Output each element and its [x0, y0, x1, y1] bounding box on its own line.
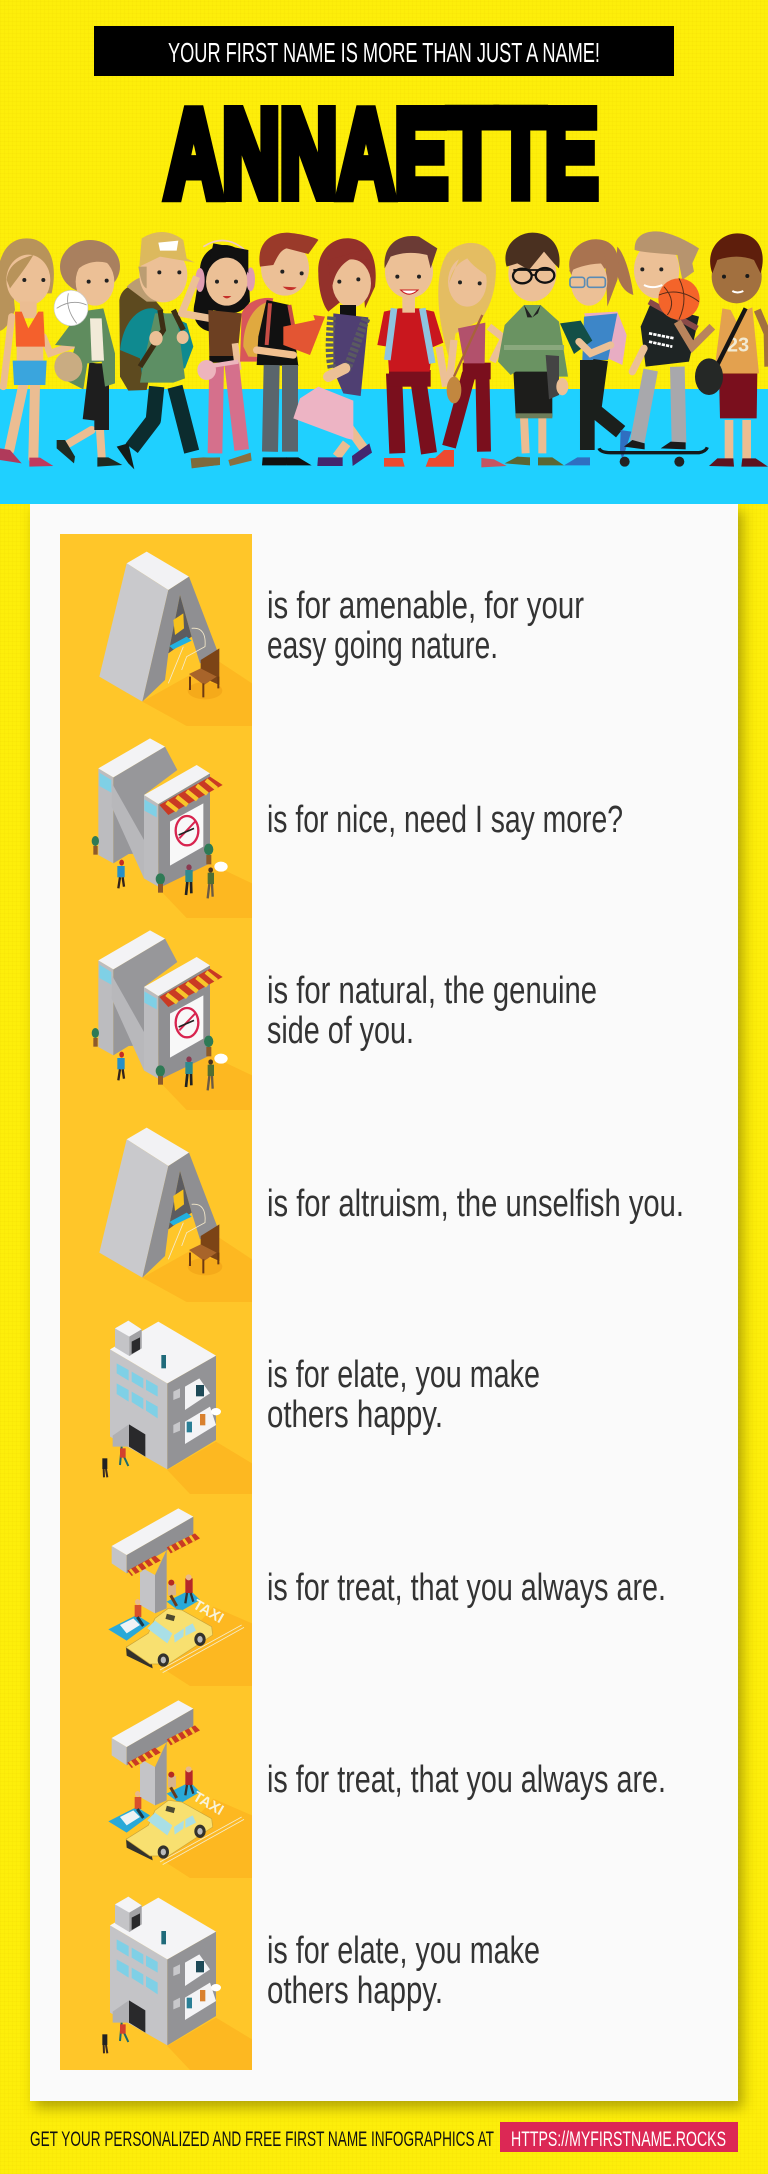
footer link badge [500, 2122, 738, 2152]
tile: letter T [60, 1494, 252, 1686]
row: T treat again [60, 1686, 666, 1878]
person 7 [377, 236, 453, 467]
tile: letter T: TAXI [190, 1597, 226, 1627]
row: A amenable [60, 534, 584, 726]
text: amenable: is for amenable, for your [267, 585, 584, 627]
text: elate again: is for elate, you make [267, 1930, 540, 1972]
text: elate [267, 1354, 540, 1436]
row: N natural [60, 918, 597, 1110]
text: natural [267, 970, 597, 1052]
text: natural: is for natural, the genuine [267, 970, 597, 1012]
person 4 [182, 241, 255, 467]
person 2 [54, 240, 122, 467]
person 1 [0, 238, 78, 467]
panel: white card [30, 504, 738, 2101]
person 12: 23 [727, 335, 749, 357]
person 8 [426, 243, 507, 467]
hero band: cyan floor [0, 389, 768, 504]
person 12 [695, 233, 768, 467]
tile: letter N again [60, 918, 252, 1110]
tile: letter E again [60, 1878, 252, 2070]
person 10 [560, 239, 633, 465]
row: T treat [60, 1494, 666, 1686]
row: N nice [60, 726, 623, 918]
tile: letter A [60, 534, 252, 726]
banner: tagline [94, 26, 674, 76]
tile: letter T again: TAXI [190, 1789, 226, 1819]
text: elate again: others happy. [267, 1970, 443, 2012]
person 11 with skateboard and basketball [599, 231, 712, 467]
text: amenable [267, 585, 584, 667]
tile: letter N [60, 726, 252, 918]
text: elate again [267, 1930, 540, 2012]
text: elate: others happy. [267, 1394, 443, 1436]
panel: letter column with statements [60, 534, 684, 2070]
row: A altruism [60, 1110, 684, 1302]
row: E elate again [60, 1878, 540, 2070]
text: nice: is for nice, need I say more? [267, 799, 623, 841]
text: natural: side of you. [267, 1010, 414, 1052]
text: elate: is for elate, you make [267, 1354, 540, 1396]
tile: letter A again [60, 1110, 252, 1302]
footer text: GET YOUR PERSONALIZED AND FREE FIRST NAME INFOGRAPHICS AT [30, 2128, 494, 2151]
person 6 [293, 238, 376, 466]
person 3 [117, 232, 220, 469]
person 9 [498, 233, 568, 465]
tile: letter E [60, 1302, 252, 1494]
row: E elate [60, 1302, 540, 1494]
text: amenable: easy going nature. [267, 625, 498, 667]
illustration: group of twelve students [0, 231, 768, 469]
person 5 [240, 233, 325, 465]
tile: letter T again [60, 1686, 252, 1878]
